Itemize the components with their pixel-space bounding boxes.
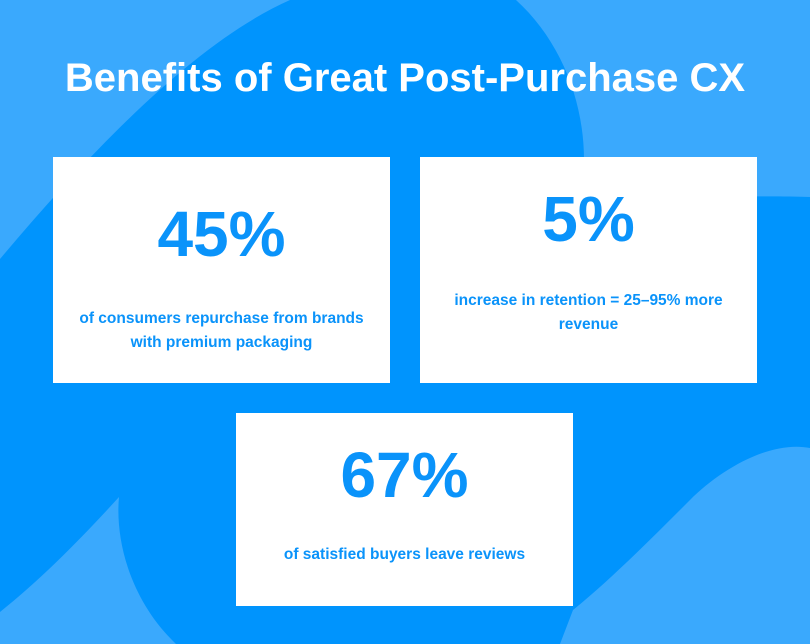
- caption 67%: of satisfied buyers leave reviews: [284, 546, 525, 563]
- stat 5%: 5%: [542, 183, 635, 255]
- caption 45%: of consumers repurchase from brands with premium packaging: [79, 310, 364, 351]
- card: 67%: [236, 413, 573, 606]
- card: 45%: [53, 157, 390, 383]
- stat 67%: 67%: [340, 439, 469, 511]
- stat 45%: 45%: [157, 198, 286, 270]
- caption 5%: increase in retention = 25–95% more revenue: [454, 292, 723, 333]
- card: 5%: [420, 157, 757, 383]
- title: Benefits of Great Post-Purchase CX: [65, 56, 745, 100]
